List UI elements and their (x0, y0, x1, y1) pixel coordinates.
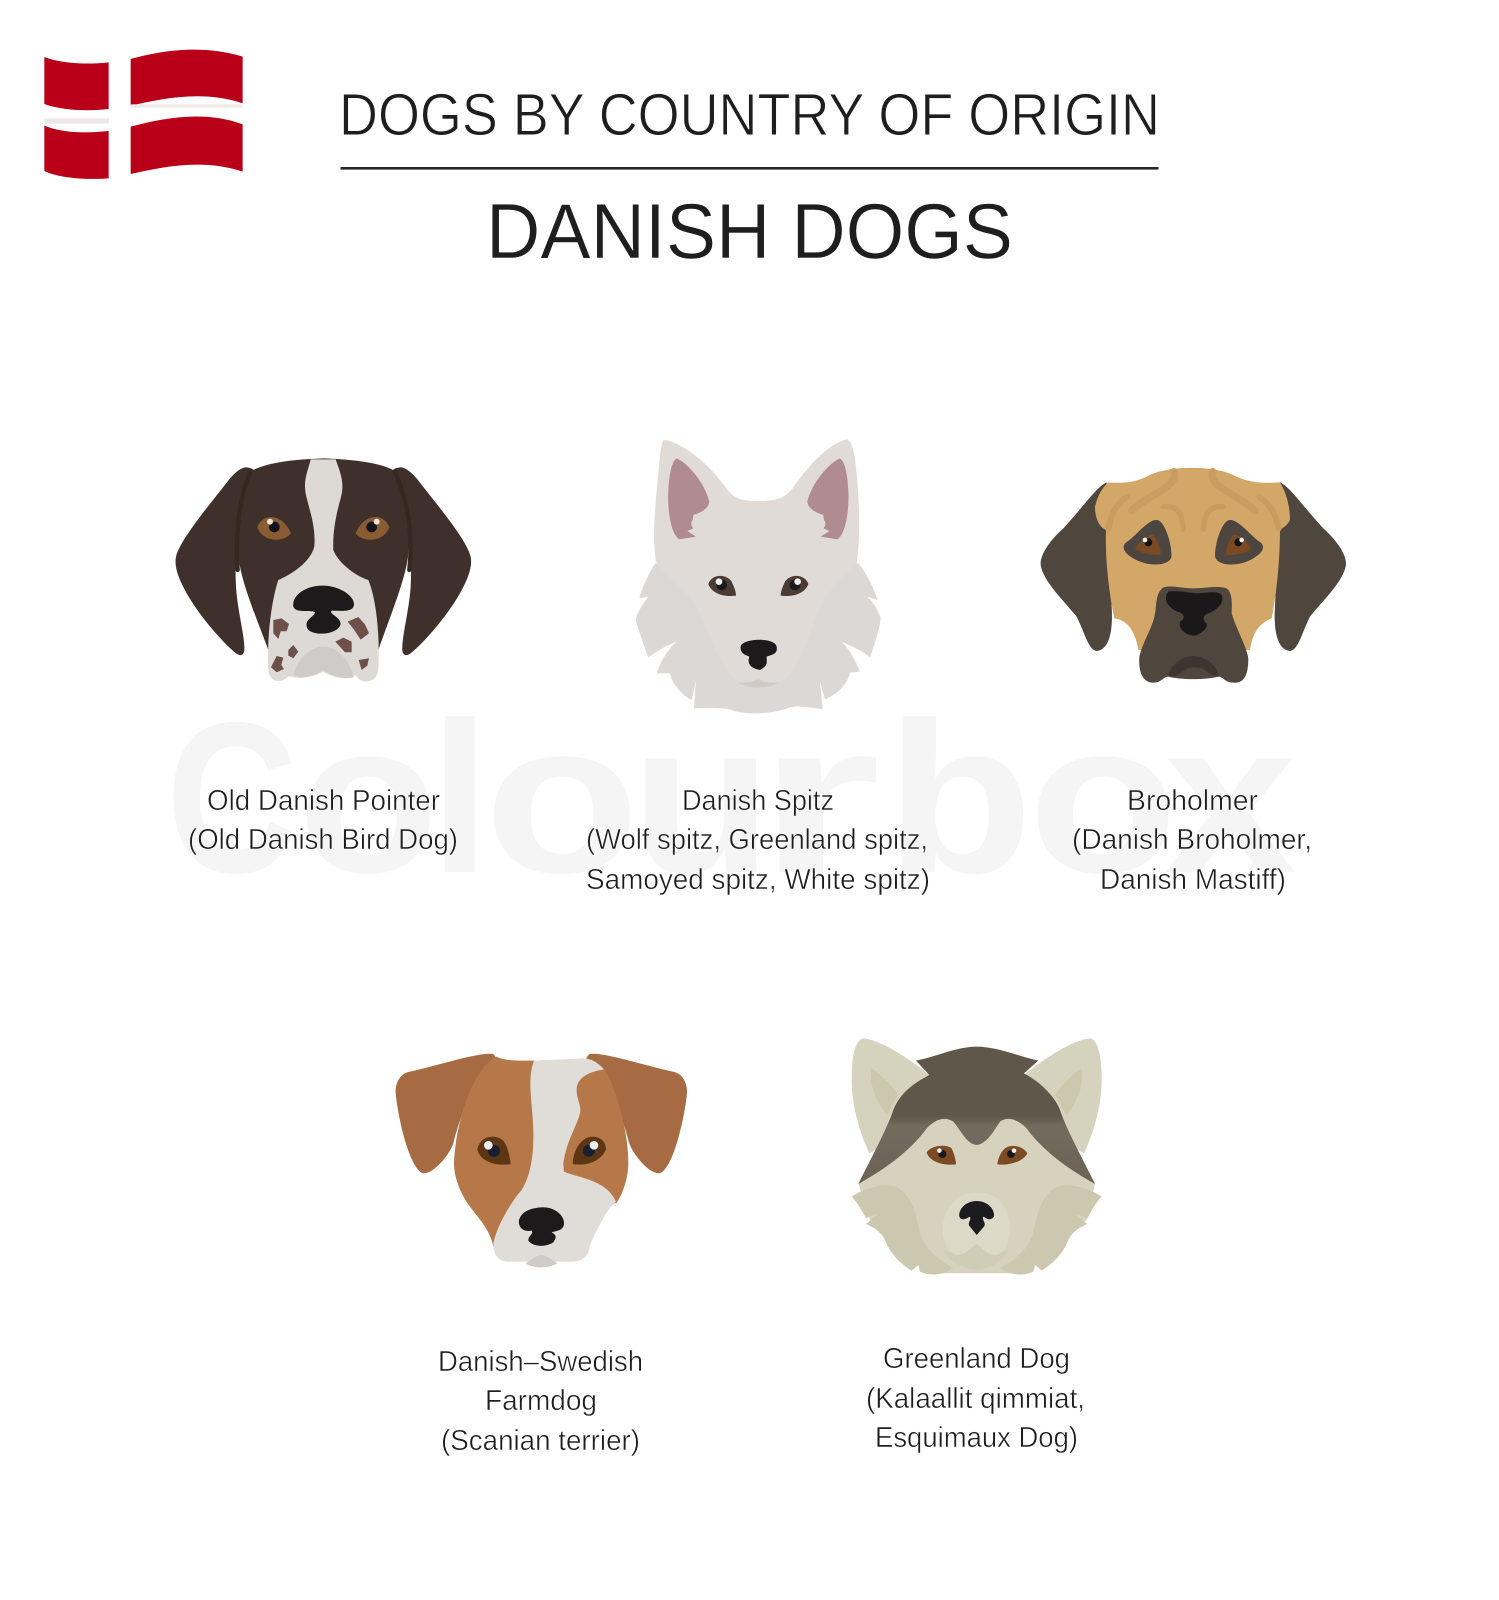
label: Danish-Swedish Farmdog: Farmdog (485, 1385, 597, 1417)
label: Danish Spitz: Samoyed spitz, White spitz) (586, 864, 930, 896)
watermark: u (631, 677, 772, 918)
label: Greenland Dog (866, 1343, 1085, 1454)
label: Broholmer: Broholmer (1127, 785, 1258, 817)
label: Danish-Swedish Farmdog: (Scanian terrier) (441, 1425, 640, 1457)
watermark (166, 677, 1297, 918)
label: Broholmer: (Danish Broholmer, (1072, 824, 1312, 856)
watermark: r (757, 677, 881, 918)
dog: Danish-Swedish Farmdog (396, 1054, 687, 1267)
label: Danish Spitz: Danish Spitz (682, 785, 834, 817)
dog: Broholmer (1041, 468, 1346, 683)
dog: Danish Spitz (636, 439, 881, 713)
watermark: o (1028, 677, 1178, 918)
watermark: o (484, 677, 640, 918)
dog: Old Danish Pointer (176, 458, 471, 681)
label: Old Danish Pointer (188, 785, 458, 856)
label: Old Danish Pointer: (Old Danish Bird Dog) (188, 824, 458, 856)
watermark: o (298, 677, 439, 918)
label: Old Danish Pointer: Old Danish Pointer (207, 785, 440, 817)
label: Danish Spitz (586, 785, 930, 896)
dog: Greenland Dog (852, 1038, 1102, 1275)
label: Broholmer: Danish Mastiff) (1100, 864, 1286, 896)
watermark: C (166, 677, 298, 918)
label: Greenland Dog: Greenland Dog (883, 1343, 1070, 1375)
watermark: x (1164, 677, 1297, 918)
label: Danish Spitz: (Wolf spitz, Greenland spitz, (586, 824, 928, 856)
label: Danish-Swedish Farmdog (438, 1346, 643, 1457)
icon: Danish flag (44, 50, 243, 179)
label: Greenland Dog: (Kalaallit qimmiat, (866, 1383, 1085, 1415)
label: Greenland Dog: Esquimaux Dog) (875, 1422, 1078, 1454)
watermark: b (886, 677, 1033, 918)
subtitle: DANISH DOGS (486, 187, 1013, 275)
title: DOGS BY COUNTRY OF ORIGIN (339, 82, 1160, 148)
label: Broholmer (1072, 785, 1312, 896)
watermark: l (430, 677, 490, 918)
label: Danish-Swedish Farmdog: Danish–Swedish (438, 1346, 643, 1378)
